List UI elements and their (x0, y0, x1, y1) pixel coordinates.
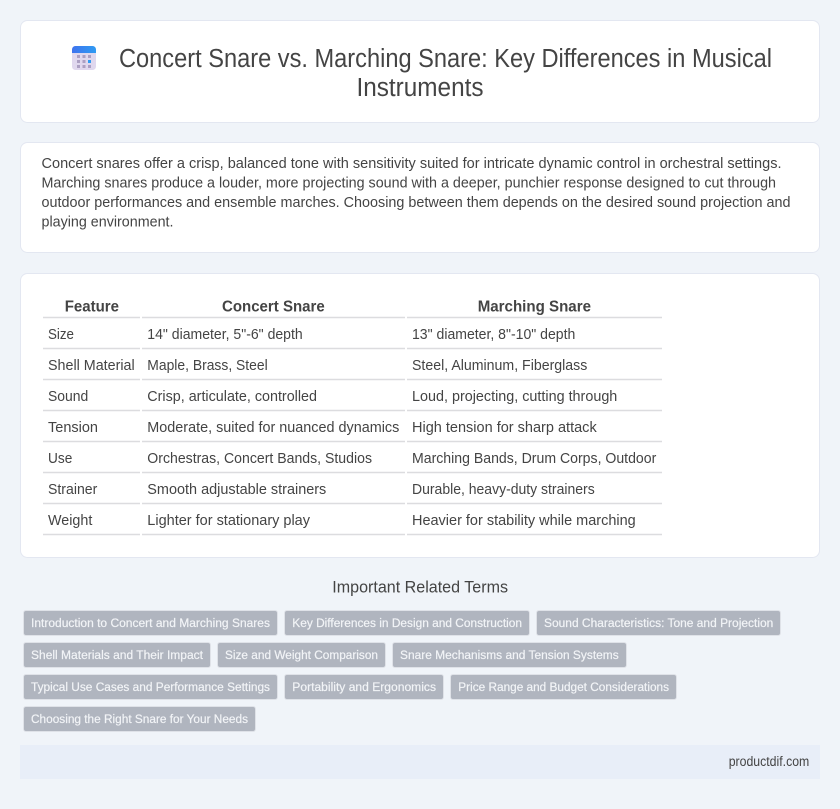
table header: Concert Snare (222, 298, 325, 316)
tag: Snare Mechanisms and Tension Systems (400, 648, 619, 662)
table row: strainer: Durable, heavy-duty strainers (412, 482, 595, 498)
title: Concert Snare vs. Marching Snare: Key Differences in Musical (119, 45, 772, 73)
tag (284, 674, 444, 700)
panel: title header (20, 20, 820, 122)
title: Instruments (356, 74, 484, 102)
table row: shell material: Shell Material (48, 358, 135, 374)
table row: strainer (43, 482, 662, 504)
table row: shell material (43, 358, 662, 380)
tag: Typical Use Cases and Performance Settings (31, 680, 270, 694)
table row: strainer: Smooth adjustable strainers (147, 482, 326, 498)
title (119, 45, 772, 102)
table row: tension: Tension (48, 420, 98, 436)
text block: introduction paragraph: Marching snares produce a louder, more projecting sound with a deeper, punchier response designed to cut through (42, 176, 776, 192)
table row: tension: High tension for sharp attack (412, 420, 597, 436)
table row: shell material: Maple, Brass, Steel (147, 358, 268, 374)
icon: calendar (72, 46, 96, 70)
tag (24, 610, 278, 636)
tag: Choosing the Right Snare for Your Needs (31, 712, 248, 726)
table header: Marching Snare (478, 298, 591, 316)
text block: introduction paragraph: outdoor performances and ensemble marches. Choosing between them depends on the desired sound projection and (42, 195, 790, 211)
text block: introduction paragraph: Concert snares offer a crisp, balanced tone with sensitivity suited for intricate dynamic control in orchestral settings. (42, 156, 781, 172)
table row: use: Use (48, 451, 72, 467)
tag (24, 674, 278, 700)
heading: important related terms: Important Related Terms (332, 579, 508, 597)
tag list: related terms (24, 610, 780, 732)
table row: sound: Loud, projecting, cutting through (412, 389, 617, 405)
table row: size: 14" diameter, 5"-6" depth (147, 327, 303, 343)
table row: size: Size (48, 327, 74, 343)
table row: sound: Sound (48, 389, 88, 405)
table row: use (43, 451, 662, 472)
table row: sound (43, 389, 662, 410)
tag: Price Range and Budget Considerations (458, 680, 669, 694)
tag (392, 642, 626, 668)
table row: tension (43, 420, 662, 442)
tag (24, 642, 210, 668)
tag (536, 610, 780, 636)
tag: Key Differences in Design and Construction (292, 616, 522, 630)
tag: Shell Materials and Their Impact (31, 648, 204, 662)
table row: size: 13" diameter, 8"-10" depth (412, 327, 575, 343)
text block: introduction paragraph (42, 156, 790, 230)
tag (218, 642, 386, 668)
table row: use: Orchestras, Concert Bands, Studios (147, 451, 372, 467)
table row: strainer: Strainer (48, 482, 97, 498)
footer source text: productdif.com (729, 754, 809, 769)
table row: weight: Heavier for stability while marching (412, 513, 636, 529)
table row: weight (43, 513, 662, 534)
tag: Size and Weight Comparison (225, 648, 378, 662)
text block: introduction paragraph: playing environment. (42, 214, 174, 230)
table row: sound: Crisp, articulate, controlled (147, 389, 317, 405)
tag (24, 706, 256, 732)
table row: weight: Lighter for stationary play (147, 513, 311, 529)
table header: Feature (65, 298, 119, 316)
table row: size (43, 327, 662, 348)
tag (284, 610, 530, 636)
table row: shell material: Steel, Aluminum, Fiberglass (412, 358, 587, 374)
panel: comparison table (20, 274, 820, 558)
table row: weight: Weight (48, 513, 92, 529)
table header (43, 298, 662, 318)
tag: Introduction to Concert and Marching Snares (31, 616, 270, 630)
table row: use: Marching Bands, Drum Corps, Outdoor (412, 451, 656, 467)
panel: introduction (20, 142, 820, 252)
tag: Portability and Ergonomics (292, 680, 436, 694)
footer bar (20, 745, 820, 779)
tag: Sound Characteristics: Tone and Projection (544, 616, 773, 630)
table row: tension: Moderate, suited for nuanced dynamics (147, 420, 399, 436)
tag (450, 674, 676, 700)
